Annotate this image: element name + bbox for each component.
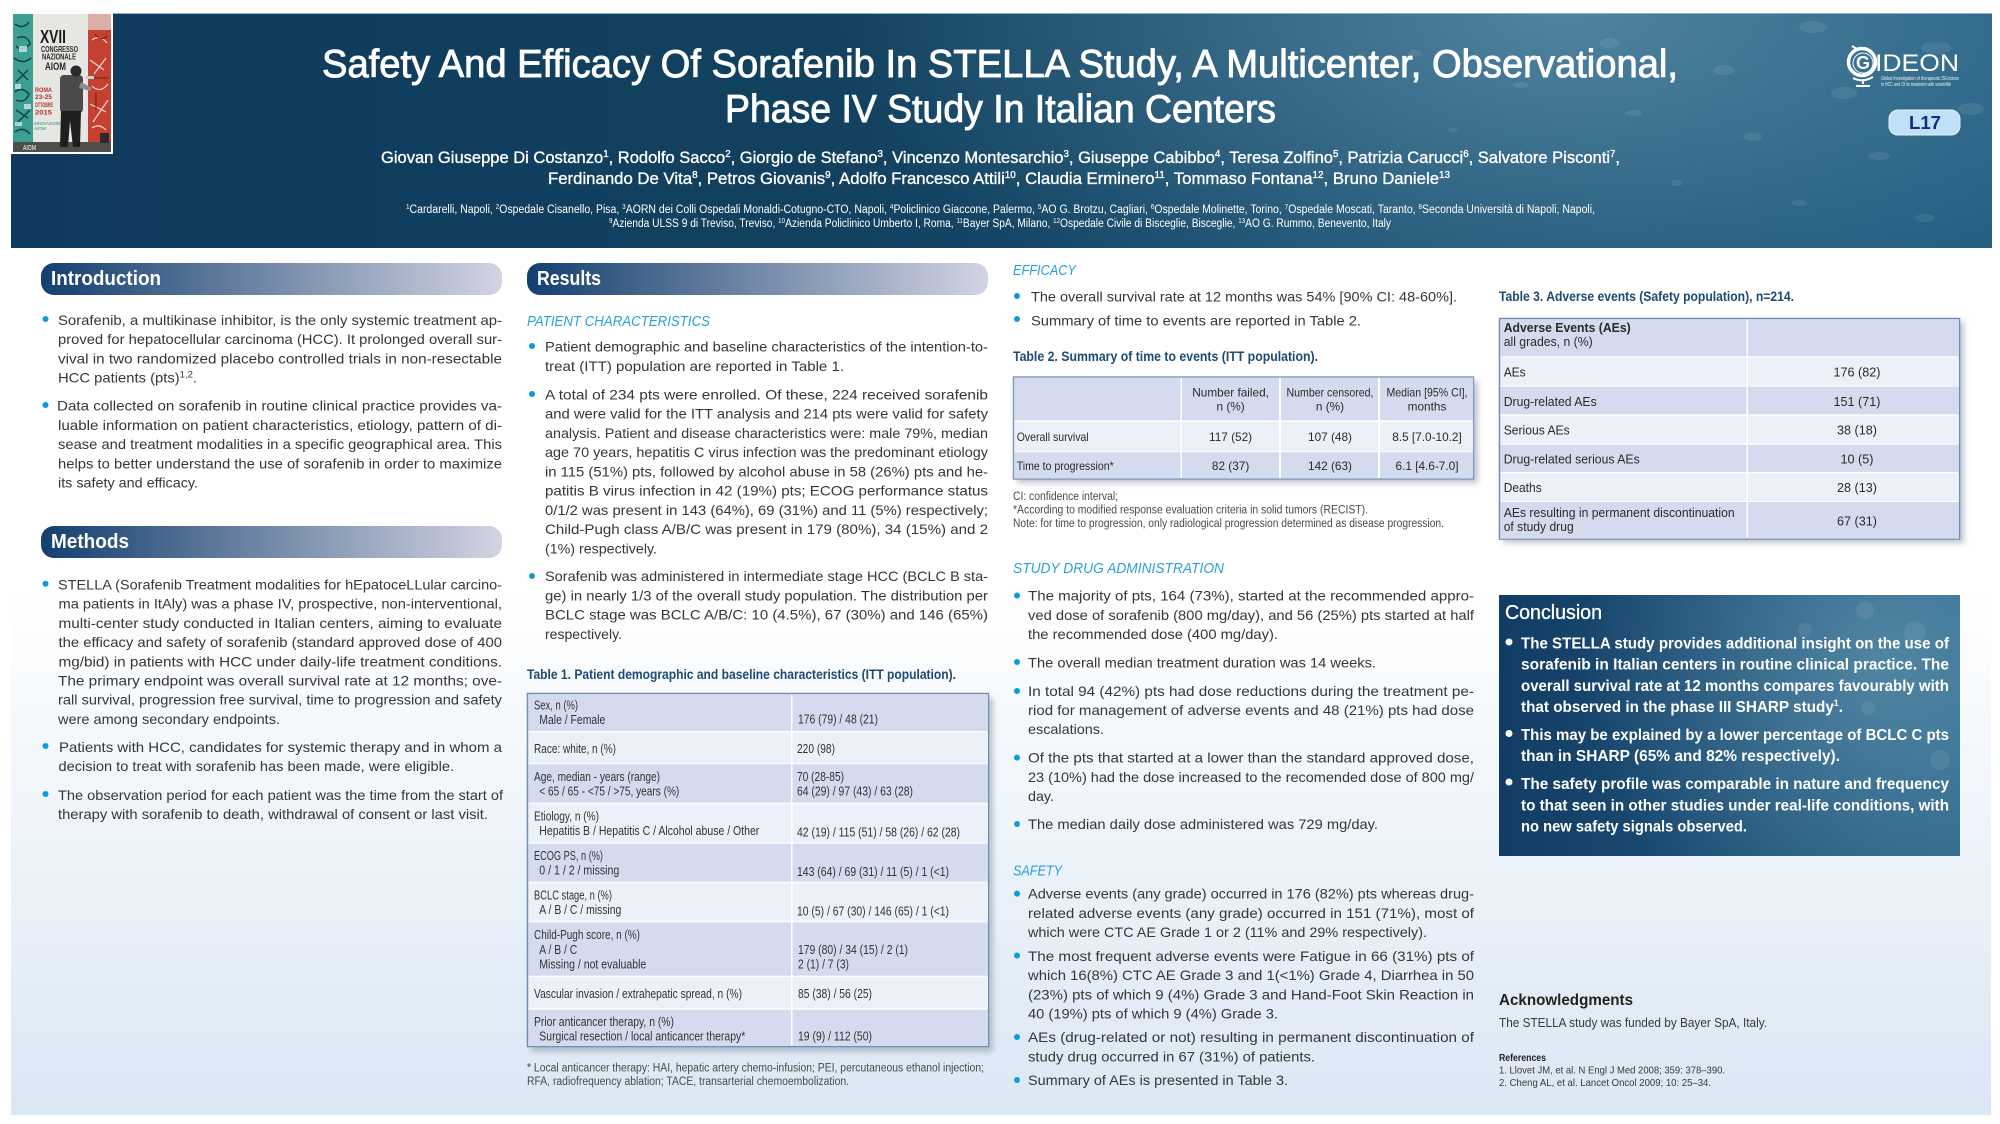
conference poster thumbnail: NAZIONALE — [42, 52, 76, 62]
title — [322, 43, 1678, 131]
table: time to events: 117 (52) — [1209, 430, 1252, 444]
authors: , Giorgio de Stefano — [731, 148, 878, 167]
heading: results: Results — [537, 268, 601, 290]
table: patient characteristics: Surgical resection / local anticancer therapy* — [539, 1029, 745, 1044]
panel: references: References — [1499, 1053, 1546, 1064]
table: patient characteristics — [528, 694, 993, 1052]
panel: acknowledgments — [1499, 992, 1767, 1030]
affiliations: 4 — [890, 204, 894, 211]
text block: introduction bullets — [42, 312, 502, 491]
text block: patient characteristics bullets: BCLC stage was BCLC A/B/C: 10 (4.5%), 67 (30%) and 146 (65%) — [545, 606, 988, 622]
text block: introduction bullets: proved for hepatocellular carcinoma (HCC). It prolonged overall sur- — [58, 331, 502, 347]
table: patient characteristics: A / B / C — [539, 942, 577, 957]
text block: methods bullets — [42, 576, 503, 822]
footnote: table 1 — [527, 1063, 984, 1088]
text block: introduction bullets: its safety and efficacy. — [58, 475, 198, 491]
affiliations: 6 — [1151, 204, 1155, 211]
text block: conclusion bullets: no new safety signals observed. — [1521, 818, 1747, 835]
table: adverse events: Serious AEs — [1504, 424, 1570, 438]
icon: GIDEON logo: G — [1856, 53, 1870, 73]
panel: introduction — [41, 263, 502, 491]
heading: methods — [41, 526, 502, 558]
text block: patient characteristics bullets: Patient demographic and baseline characteristics of the intention-to- — [545, 339, 988, 355]
affiliations: 1 — [406, 204, 410, 211]
panel: references: 2. Cheng AL, et al. Lancet Oncol 2009; 10: 25–34. — [1499, 1077, 1711, 1089]
text block: patient characteristics bullets — [529, 339, 988, 642]
text block: methods bullets: rall survival, progression free survival, time to progression and safety — [58, 692, 502, 708]
text block: patient characteristics bullets: age 70 years, hepatitis C virus infection was the predominant etiology — [545, 444, 988, 460]
table caption: table 1: Table 1. Patient demographic and baseline characteristics (ITT population). — [527, 667, 956, 682]
authors: 13 — [1439, 170, 1450, 181]
panel: acknowledgments: Acknowledgments — [1499, 992, 1633, 1009]
text block: safety bullets: study drug occurred in 67 (31%) of patients. — [1028, 1049, 1315, 1065]
authors: 4 — [1215, 149, 1221, 160]
conference poster thumbnail: CONGRESSO — [41, 44, 78, 54]
table: time to events: Number failed, — [1192, 386, 1269, 400]
table: patient characteristics: Prior anticancer therapy, n (%) — [534, 1014, 674, 1029]
text block: administration bullets: ved dose of sorafenib (800 mg/day), and 56 (25%) pts started at half — [1028, 607, 1474, 623]
text block: methods bullets: The observation period for each patient was the time from the start of — [58, 787, 503, 803]
text block: administration bullets: Of the pts that started at a lower than the standard approved dose, — [1028, 750, 1474, 766]
text block: conclusion bullets: overall survival rate at 12 months compares favourably with — [1521, 678, 1949, 695]
text block: patient characteristics bullets: 0/1/2 was present in 143 (64%), 69 (31%) and 11 (5%) respectively; — [545, 502, 988, 518]
text block: safety bullets: which were CTC AE Grade 1 or 2 (11% and 29% respectively). — [1027, 924, 1427, 940]
table: adverse events: Deaths — [1504, 481, 1542, 495]
table: adverse events: 151 (71) — [1834, 395, 1880, 409]
text block: introduction bullets: vival in two randomized placebo controlled trials in non-resectable — [58, 350, 502, 366]
footnote: table 2: Note: for time to progression, only radiological progression determined as disease progression. — [1013, 518, 1444, 530]
text block: safety bullets: AEs (drug-related or not) resulting in permanent discontinuation of — [1028, 1029, 1474, 1045]
table: patient characteristics: < 65 / 65 - <75 / >75, years (%) — [539, 784, 679, 799]
authors: , Salvatore Pisconti — [1469, 148, 1610, 167]
table: patient characteristics: BCLC stage, n (%) — [534, 888, 612, 903]
text block: safety bullets: The most frequent adverse events were Fatigue in 66 (31%) pts of — [1028, 948, 1474, 964]
text block: conclusion bullets: than in SHARP (65% and 82% respectively). — [1521, 748, 1840, 765]
text block: administration bullets: In total 94 (42%) pts had dose reductions during the treatment pe- — [1028, 683, 1474, 699]
table: patient characteristics: 220 (98) — [797, 741, 835, 756]
affiliations: Ospedale Cisanello, Pisa, — [499, 204, 622, 216]
table: adverse events: 176 (82) — [1834, 366, 1880, 380]
table: patient characteristics: Child-Pugh score, n (%) — [534, 927, 640, 942]
authors: Giovan Giuseppe Di Costanzo — [381, 148, 610, 167]
authors: Ferdinando De Vita — [548, 169, 694, 188]
conference poster thumbnail: 2015 — [35, 110, 52, 116]
panel: study drug administration — [1013, 560, 1474, 832]
text block: introduction bullets: Sorafenib, a multikinase inhibitor, is the only systemic treatment ap- — [58, 312, 502, 328]
text block: methods bullets: The primary endpoint was overall survival rate at 12 months; ove- — [58, 672, 502, 688]
table: time to events — [1014, 377, 1478, 483]
conference poster thumbnail: ROMA — [35, 87, 52, 94]
table: time to events: Overall survival — [1017, 430, 1089, 444]
affiliations: AO G. Rummo, Benevento, Italy — [1245, 218, 1391, 230]
authors: , Adolfo Francesco Attili — [831, 169, 1005, 188]
affiliations: Cardarelli, Napoli, — [410, 204, 496, 216]
authors: 6 — [1463, 149, 1469, 160]
authors: 7 — [1610, 149, 1616, 160]
affiliations — [406, 204, 1595, 230]
authors: , Petros Giovanis — [698, 169, 825, 188]
text block: introduction bullets: . — [193, 370, 197, 386]
title: Safety And Efficacy Of Sorafenib In STELLA Study, A Multicenter, Observational, — [322, 43, 1678, 86]
panel: efficacy — [1013, 262, 1478, 530]
footnote: table 1: RFA, radiofrequency ablation; TACE, transarterial chemoembolization. — [527, 1076, 849, 1088]
affiliations: 7 — [1285, 204, 1288, 211]
authors: 3 — [1064, 149, 1069, 160]
icon: GIDEON logo: Global Investigation of therapeutic DEcisions — [1881, 76, 1959, 82]
text block: efficacy bullets: Summary of time to events are reported in Table 2. — [1031, 313, 1361, 329]
table caption: table 2: Table 2. Summary of time to events (ITT population). — [1013, 349, 1318, 364]
table: patient characteristics: A / B / C / missing — [539, 902, 621, 917]
affiliations: Ospedale Moscati, Taranto, — [1288, 204, 1418, 216]
text block: methods bullets: the efficacy and safety of sorafenib (standard approved dose of 400 — [58, 634, 502, 650]
affiliations: 12 — [1053, 218, 1060, 225]
text block: patient characteristics bullets: analysis. Patient and disease characteristics were: male 79%, median — [545, 425, 988, 441]
table: patient characteristics: ECOG PS, n (%) — [534, 848, 603, 863]
text block: introduction bullets: 1,2 — [180, 370, 193, 380]
authors: , Tommaso Fontana — [1165, 169, 1313, 188]
table: patient characteristics: Hepatitis B / Hepatitis C / Alcohol abuse / Other — [539, 823, 760, 838]
text block: patient characteristics bullets: Child-Pugh class A/B/C was present in 179 (80%), 34 (15%) and 2 — [545, 521, 988, 537]
table: time to events: Number censored, — [1286, 386, 1374, 400]
text block: administration bullets: riod for management of adverse events and 48 (21%) pts had dose — [1028, 702, 1474, 718]
table: patient characteristics: 85 (38) / 56 (25) — [798, 986, 872, 1001]
text block: safety bullets: Adverse events (any grade) occurred in 176 (82%) pts whereas drug- — [1028, 886, 1474, 902]
footnote: table 2: *According to modified response evaluation criteria in solid tumors (RECIST). — [1013, 504, 1368, 516]
subheading: study drug administration: STUDY DRUG ADMINISTRATION — [1013, 560, 1224, 577]
icon: GIDEON logo: in HCC and Of its treatment with sorafeNib — [1881, 82, 1951, 88]
authors: 3 — [878, 149, 883, 160]
authors: , Claudia Erminero — [1016, 169, 1155, 188]
panel: adverse events — [1499, 289, 1964, 543]
table: adverse events: 28 (13) — [1837, 481, 1877, 495]
conference poster thumbnail: 23-25 — [35, 94, 52, 101]
conference poster thumbnail: XVII — [40, 27, 66, 47]
authors: 5 — [1333, 149, 1339, 160]
table: patient characteristics: 143 (64) / 69 (31) / 11 (5) / 1 (<1) — [797, 864, 949, 879]
text block: efficacy bullets: The overall survival rate at 12 months was 54% [90% CI: 48-60%]. — [1031, 289, 1457, 305]
table: adverse events: 10 (5) — [1841, 453, 1873, 467]
text block: methods bullets: Patients with HCC, candidates for systemic therapy and in whom a — [59, 739, 502, 755]
conference poster thumbnail: AIOM — [34, 126, 46, 131]
authors: , Bruno Daniele — [1324, 169, 1439, 188]
table: adverse events: Adverse Events (AEs) — [1504, 321, 1631, 335]
table: patient characteristics: 176 (79) / 48 (21) — [798, 711, 878, 726]
table caption: table 3: Table 3. Adverse events (Safety population), n=214. — [1499, 289, 1794, 304]
text block: conclusion bullets — [1506, 635, 1950, 835]
text block: methods bullets: mg/bid) in patients with HCC under daily-life treatment conditions. — [58, 653, 502, 669]
footnote: table 2 — [1013, 491, 1444, 530]
table: time to events: 142 (63) — [1308, 459, 1352, 473]
table: patient characteristics: 2 (1) / 7 (3) — [798, 957, 849, 972]
text block: conclusion bullets: 1 — [1834, 698, 1839, 708]
heading: methods: Methods — [51, 531, 129, 553]
conference poster thumbnail: AIOM — [45, 61, 66, 73]
table: adverse events — [1500, 318, 1964, 543]
table: patient characteristics: Sex, n (%) — [534, 697, 578, 712]
text block: methods bullets: therapy with sorafenib to death, withdrawal of consent or last visit. — [58, 806, 488, 822]
affiliations: 13 — [1238, 218, 1245, 225]
text block: patient characteristics bullets: in 115 (51%) pts, followed by alcohol abuse in 58 (26%) pts and he- — [545, 463, 988, 479]
authors: 8 — [692, 170, 698, 181]
icon: GIDEON logo — [1848, 46, 1959, 88]
table: time to events: months — [1408, 400, 1446, 414]
text block: conclusion bullets: . — [1839, 699, 1843, 716]
table: patient characteristics: Vascular invasion / extrahepatic spread, n (%) — [534, 986, 742, 1001]
text block: introduction bullets: Data collected on sorafenib in routine clinical practice provides va- — [57, 398, 502, 414]
affiliations: 2 — [496, 204, 499, 211]
table: time to events: 6.1 [4.6-7.0] — [1396, 459, 1458, 473]
text block: methods bullets: multi-center study conducted in Italian centers, aiming to evaluate — [58, 615, 502, 631]
table: patient characteristics: Race: white, n (%) — [534, 741, 616, 756]
text block: safety bullets: 40 (19%) pts of which 9 (4%) Grade 3. — [1028, 1005, 1278, 1021]
text block: patient characteristics bullets: A total of 234 pts were enrolled. Of these, 224 received sorafenib — [545, 386, 988, 402]
text block: methods bullets: were among secondary endpoints. — [57, 711, 280, 727]
affiliations: Policlinico Giaccone, Palermo, — [893, 204, 1038, 216]
table: patient characteristics: 0 / 1 / 2 / missing — [539, 863, 619, 878]
authors: , Rodolfo Sacco — [609, 148, 725, 167]
affiliations: 5 — [1038, 204, 1041, 211]
panel: acknowledgments: The STELLA study was funded by Bayer SpA, Italy. — [1499, 1015, 1767, 1030]
heading: introduction — [41, 263, 502, 295]
text block: administration bullets: The overall median treatment duration was 14 weeks. — [1028, 654, 1376, 670]
heading: introduction: Introduction — [51, 268, 161, 290]
authors: , Teresa Zolfino — [1220, 148, 1333, 167]
text block: methods bullets: ma patients in ItAly) was a phase IV, prospective, non-interventional, — [58, 596, 502, 612]
text block: conclusion bullets: to that seen in other studies under real-life conditions, with — [1521, 798, 1949, 814]
text block: administration bullets: escalations. — [1028, 721, 1104, 737]
text block: conclusion bullets: The safety profile was comparable in nature and frequency — [1521, 776, 1949, 793]
table: adverse events: AEs — [1504, 366, 1526, 380]
text block: administration bullets — [1014, 588, 1474, 832]
text block: safety bullets: Summary of AEs is presented in Table 3. — [1028, 1072, 1288, 1088]
affiliations: Ospedale Civile di Bisceglie, Bisceglie, — [1060, 218, 1238, 230]
authors: , Patrizia Carucci — [1338, 148, 1463, 167]
affiliations: Seconda Università di Napoli, Napoli, — [1422, 204, 1595, 216]
table: patient characteristics: Etiology, n (%) — [534, 809, 599, 824]
affiliations: Azienda ULSS 9 di Treviso, Treviso, — [612, 218, 778, 230]
affiliations: Ospedale Molinette, Torino, — [1154, 204, 1285, 216]
text block: administration bullets: 23 (10%) had the dose increased to the recomended dose of 800 mg/ — [1028, 769, 1474, 785]
subheading: patient characteristics: PATIENT CHARACTERISTICS — [527, 313, 710, 330]
footnote: table 1: * Local anticancer therapy: HAI, hepatic artery chemo-infusion; PEI, percutaneous ethanol injection; — [527, 1063, 984, 1075]
text block: patient characteristics bullets: and were valid for the ITT analysis and 214 pts were valid for safety — [545, 406, 988, 422]
table: patient characteristics: 19 (9) / 112 (50) — [798, 1029, 872, 1044]
affiliations: AO G. Brotzu, Cagliari, — [1041, 204, 1151, 216]
text block: patient characteristics bullets: respectively. — [545, 626, 622, 642]
text block: conclusion bullets: that observed in the phase III SHARP study — [1521, 699, 1839, 716]
badge: L17: L17 — [1909, 113, 1941, 133]
text block: administration bullets: The median daily dose administered was 729 mg/day. — [1028, 816, 1378, 832]
conference poster thumbnail: OTTOBRE — [35, 102, 53, 109]
panel: methods — [41, 526, 503, 822]
text block: patient characteristics bullets: patitis B virus infection in 42 (19%) pts; ECOG performance status — [545, 482, 988, 498]
conference poster thumbnail — [11, 13, 113, 154]
heading: results — [527, 263, 988, 295]
text block: safety bullets — [1014, 886, 1474, 1088]
table: adverse events: Drug-related AEs — [1504, 395, 1597, 409]
text block: safety bullets: (23%) pts of which 9 (4%) Grade 3 and Hand-Foot Skin Reaction in — [1028, 986, 1474, 1002]
affiliations: 10 — [778, 218, 785, 225]
text block: introduction bullets: sease and treatment modalities in a specific geographical area. This — [58, 436, 502, 452]
affiliations: 3 — [622, 204, 626, 211]
affiliations: AORN dei Colli Ospedali Monaldi-Cotugno-CTO, Napoli, — [626, 204, 890, 216]
text block: administration bullets: day. — [1028, 788, 1054, 804]
table: time to events: Time to progression* — [1017, 459, 1114, 473]
text block: methods bullets: decision to treat with sorafenib has been made, were eligible. — [58, 758, 454, 774]
affiliations: 9 — [609, 218, 613, 225]
badge: L17 — [1889, 110, 1960, 135]
text block: introduction bullets: luable information on patient characteristics, etiology, pattern of di- — [58, 417, 502, 433]
table: patient characteristics: Age, median - years (range) — [534, 769, 660, 784]
text block: introduction bullets: helps to better understand the use of sorafenib in order to maximize — [58, 455, 502, 471]
text block: conclusion bullets: This may be explained by a lower percentage of BCLC C pts — [1521, 727, 1949, 744]
authors: 9 — [825, 170, 831, 181]
table: patient characteristics: 10 (5) / 67 (30) / 146 (65) / 1 (<1) — [797, 904, 949, 919]
table: patient characteristics: Male / Female — [539, 712, 605, 727]
text block: safety bullets: which 16(8%) CTC AE Grade 3 and 1(<1%) Grade 4, Diarrhea in 50 — [1027, 967, 1474, 983]
text block: safety bullets: related adverse events (any grade) occurred in 151 (71%), most of — [1028, 905, 1474, 921]
authors: , — [1615, 148, 1620, 167]
authors: 12 — [1313, 170, 1324, 181]
text block: conclusion bullets: sorafenib in Italian centers in routine clinical practice. The — [1521, 657, 1949, 674]
authors: 2 — [725, 149, 731, 160]
table: time to events: n (%) — [1217, 400, 1245, 414]
conference poster thumbnail: AIOM — [23, 145, 36, 152]
text block: patient characteristics bullets: treat (ITT) population are reported in Table 1. — [545, 358, 844, 374]
table: patient characteristics: 42 (19) / 115 (51) / 58 (26) / 62 (28) — [797, 825, 960, 840]
panel: header banner — [11, 13, 1992, 248]
authors: , Giuseppe Cabibbo — [1069, 148, 1215, 167]
table: time to events: n (%) — [1316, 400, 1344, 414]
authors — [381, 148, 1620, 188]
authors: 10 — [1005, 170, 1016, 181]
panel: safety — [1013, 862, 1474, 1088]
table: time to events: 107 (48) — [1308, 430, 1352, 444]
table: adverse events: of study drug — [1504, 520, 1574, 534]
text block: patient characteristics bullets: Sorafenib was administered in intermediate stage HCC (BCLC B sta- — [545, 568, 988, 584]
icon: GIDEON logo: IDEON — [1875, 50, 1959, 77]
text block: methods bullets: STELLA (Sorafenib Treatment modalities for hEpatoceLLular carcino- — [58, 576, 502, 592]
affiliations: 8 — [1418, 204, 1422, 211]
table: adverse events: 38 (18) — [1837, 424, 1877, 438]
table: adverse events: 67 (31) — [1837, 514, 1877, 528]
subheading: safety: SAFETY — [1013, 862, 1063, 880]
text block: conclusion bullets: The STELLA study provides additional insight on the use of — [1521, 635, 1950, 652]
text block: introduction bullets: HCC patients (pts) — [58, 370, 173, 386]
table: adverse events: Drug-related serious AEs — [1504, 453, 1640, 467]
table: patient characteristics: Missing / not evaluable — [539, 957, 646, 972]
affiliations: 11 — [956, 218, 963, 225]
table: time to events: 82 (37) — [1212, 459, 1249, 473]
table: patient characteristics: 179 (80) / 34 (15) / 2 (1) — [798, 942, 908, 957]
panel: references — [1499, 1053, 1725, 1089]
title: Phase IV Study In Italian Centers — [725, 88, 1276, 131]
text block: administration bullets: The majority of pts, 164 (73%), started at the recommended appro- — [1028, 588, 1474, 604]
authors: 1 — [603, 149, 609, 160]
affiliations: Azienda Policlinico Umberto I, Roma, — [785, 218, 956, 230]
panel: conclusion — [1499, 595, 1960, 856]
authors: , Vincenzo Montesarchio — [883, 148, 1064, 167]
table: time to events: 8.5 [7.0-10.2] — [1392, 430, 1462, 444]
heading: conclusion: Conclusion — [1505, 602, 1602, 624]
panel: references: 1. Llovet JM, et al. N Engl J Med 2008; 359: 378–390. — [1499, 1065, 1725, 1077]
affiliations: Bayer SpA, Milano, — [963, 218, 1053, 230]
table: patient characteristics: 70 (28-85) — [797, 769, 844, 784]
table: adverse events: all grades, n (%) — [1504, 335, 1593, 349]
subheading: efficacy: EFFICACY — [1013, 262, 1077, 279]
conference poster thumbnail: INNOVAZIONE — [34, 121, 61, 126]
text block: patient characteristics bullets: (1%) respectively. — [545, 540, 657, 556]
text block: patient characteristics bullets: ge) in nearly 1/3 of the overall study population. The distribution per — [545, 587, 988, 603]
table: adverse events: AEs resulting in permanent discontinuation — [1504, 506, 1735, 520]
table: patient characteristics: 64 (29) / 97 (43) / 63 (28) — [797, 784, 913, 799]
text block: efficacy bullets — [1014, 289, 1457, 329]
text block: administration bullets: the recommended dose (400 mg/day). — [1028, 626, 1278, 642]
authors: 11 — [1155, 170, 1165, 181]
panel: results — [527, 263, 993, 1088]
footnote: table 2: CI: confidence interval; — [1013, 491, 1118, 503]
table: time to events: Median [95% CI], — [1386, 386, 1468, 400]
